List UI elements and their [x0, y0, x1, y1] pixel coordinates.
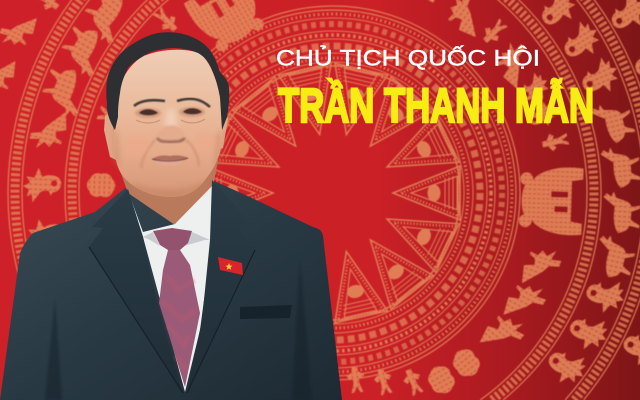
- collar shadow: [143, 232, 210, 246]
- jacket sleeve shadows: [45, 262, 312, 400]
- eyebrows: [134, 99, 210, 107]
- under-eye lines: [136, 119, 205, 123]
- right lapel: [187, 180, 255, 393]
- chin and jaw shading: [113, 130, 222, 200]
- nose: [156, 125, 185, 145]
- ears: [104, 112, 228, 160]
- shirt: [128, 186, 212, 392]
- jacket: [0, 180, 342, 400]
- necktie: [153, 228, 200, 387]
- inner drum rings: [146, 6, 520, 380]
- cheek colouring: [125, 133, 215, 154]
- subtitle: CHỦ TỊCH QUỐC HỘI: [276, 44, 540, 70]
- left lapel: [89, 189, 183, 393]
- hair: [106, 32, 229, 130]
- breast pocket: [240, 305, 292, 319]
- mouth: [152, 155, 188, 166]
- lapel pin: [218, 257, 243, 275]
- eyes: [139, 108, 202, 115]
- nasolabial shading: [141, 140, 199, 168]
- eye sockets: [135, 107, 205, 118]
- neck: [118, 160, 218, 225]
- figures: inner band: [86, 0, 584, 398]
- drum star: [206, 63, 460, 323]
- nose bridge highlight: [165, 108, 177, 136]
- portrait: Trần Thanh Mẫn: [0, 32, 342, 400]
- face: [113, 50, 222, 197]
- lapel edges: [89, 247, 255, 393]
